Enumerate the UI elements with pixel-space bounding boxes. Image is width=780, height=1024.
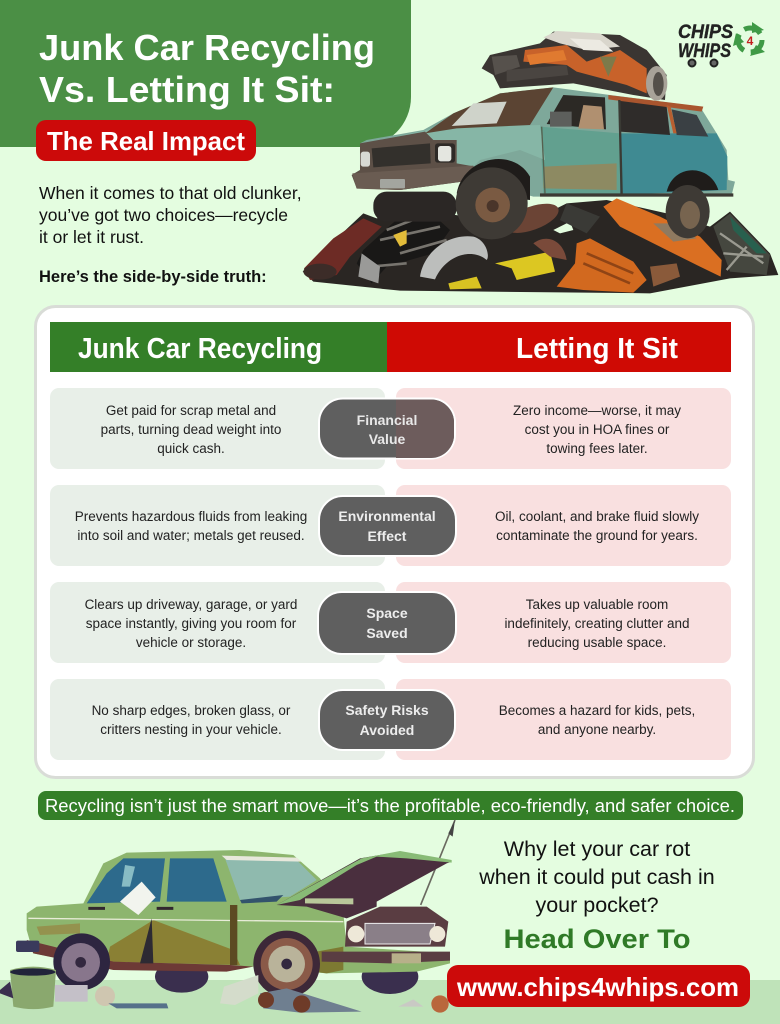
- row: space saved: reducing usable space.: [528, 635, 666, 650]
- logo: 4: [747, 34, 754, 48]
- title: Vs. Letting It Sit:: [39, 69, 335, 110]
- row: safety risks avoided: Becomes a hazard for kids, pets,: [499, 703, 695, 718]
- head over to: Head Over To: [504, 924, 690, 954]
- row: space saved: Saved: [366, 625, 408, 641]
- row: space saved: space instantly, giving you room for: [86, 616, 297, 631]
- header panel: [0, 0, 411, 147]
- row: space saved: Space: [366, 605, 408, 621]
- intro text: it or let it rust.: [39, 227, 144, 247]
- row: environmental effect: into soil and water; metals get reused.: [77, 528, 305, 543]
- top wreck: [482, 31, 667, 101]
- subtitle pill: The Real Impact: [47, 126, 245, 156]
- row: safety risks avoided: Safety Risks: [345, 702, 429, 718]
- intro text: you’ve got two choices—recycle: [39, 205, 288, 225]
- row: environmental effect: contaminate the ground for years.: [496, 528, 698, 543]
- subtitle pill: [36, 120, 256, 161]
- row: safety risks avoided: and anyone nearby.: [538, 722, 656, 737]
- intro text: When it comes to that old clunker,: [39, 183, 302, 203]
- car body: [352, 87, 735, 239]
- row: financial value: cost you in HOA fines or: [525, 422, 670, 437]
- row: environmental effect: [50, 485, 731, 566]
- ground strip: [0, 980, 780, 1024]
- row: safety risks avoided: No sharp edges, broken glass, or: [92, 703, 291, 718]
- row: environmental effect: Environmental: [338, 508, 436, 524]
- row: financial value: [50, 388, 731, 469]
- column header: letting it sit: Letting It Sit: [516, 333, 678, 365]
- row: financial value: Get paid for scrap metal and: [106, 403, 276, 418]
- summary banner: Recycling isn’t just the smart move—it’s the profitable, eco-friendly, and safer choice.: [45, 796, 735, 816]
- intro text: [39, 183, 302, 247]
- row: space saved: Clears up driveway, garage, or yard: [85, 597, 297, 612]
- side-by-side line: Here’s the side-by-side truth:: [39, 268, 267, 286]
- row: space saved: [50, 582, 731, 663]
- row: safety risks avoided: Avoided: [360, 722, 414, 738]
- illustration: green car with open hood: [0, 820, 455, 1013]
- row: safety risks avoided: [50, 679, 731, 760]
- title: Junk Car Recycling: [39, 27, 375, 68]
- logo: [678, 22, 765, 66]
- website button: [447, 965, 750, 1007]
- row: financial value: parts, turning dead weight into: [101, 422, 281, 437]
- row: environmental effect: Oil, coolant, and brake fluid slowly: [495, 509, 699, 524]
- row: financial value: Value: [369, 431, 405, 447]
- logo: CHIPS: [678, 22, 733, 43]
- row: financial value: towing fees later.: [546, 441, 648, 456]
- illustration: wrecked car on junk pile: [303, 31, 778, 293]
- logo: WHIPS: [678, 41, 731, 62]
- row: space saved: indefinitely, creating clutter and: [504, 616, 690, 631]
- title: [39, 27, 375, 110]
- column header: recycling: Junk Car Recycling: [78, 333, 322, 365]
- column header: letting it sit: [387, 322, 731, 372]
- call to action question: when it could put cash in: [478, 865, 715, 889]
- row: space saved: vehicle or storage.: [136, 635, 246, 650]
- junk pile: [303, 198, 778, 293]
- row: financial value: quick cash.: [157, 441, 225, 456]
- row: environmental effect: Prevents hazardous fluids from leaking: [75, 509, 307, 524]
- column header: recycling: [50, 322, 387, 372]
- row: environmental effect: Effect: [368, 528, 407, 544]
- call to action question: your pocket?: [535, 893, 659, 917]
- row: financial value: Zero income—worse, it may: [513, 403, 681, 418]
- row: financial value: Financial: [357, 412, 417, 428]
- call to action question: Why let your car rot: [504, 837, 690, 861]
- website button: www.chips4whips.com: [456, 972, 739, 1002]
- comparison panel: [36, 306, 754, 778]
- row: safety risks avoided: critters nesting in your vehicle.: [100, 722, 282, 737]
- summary banner: [38, 791, 743, 820]
- call to action question: [478, 837, 715, 917]
- row: space saved: Takes up valuable room: [526, 597, 668, 612]
